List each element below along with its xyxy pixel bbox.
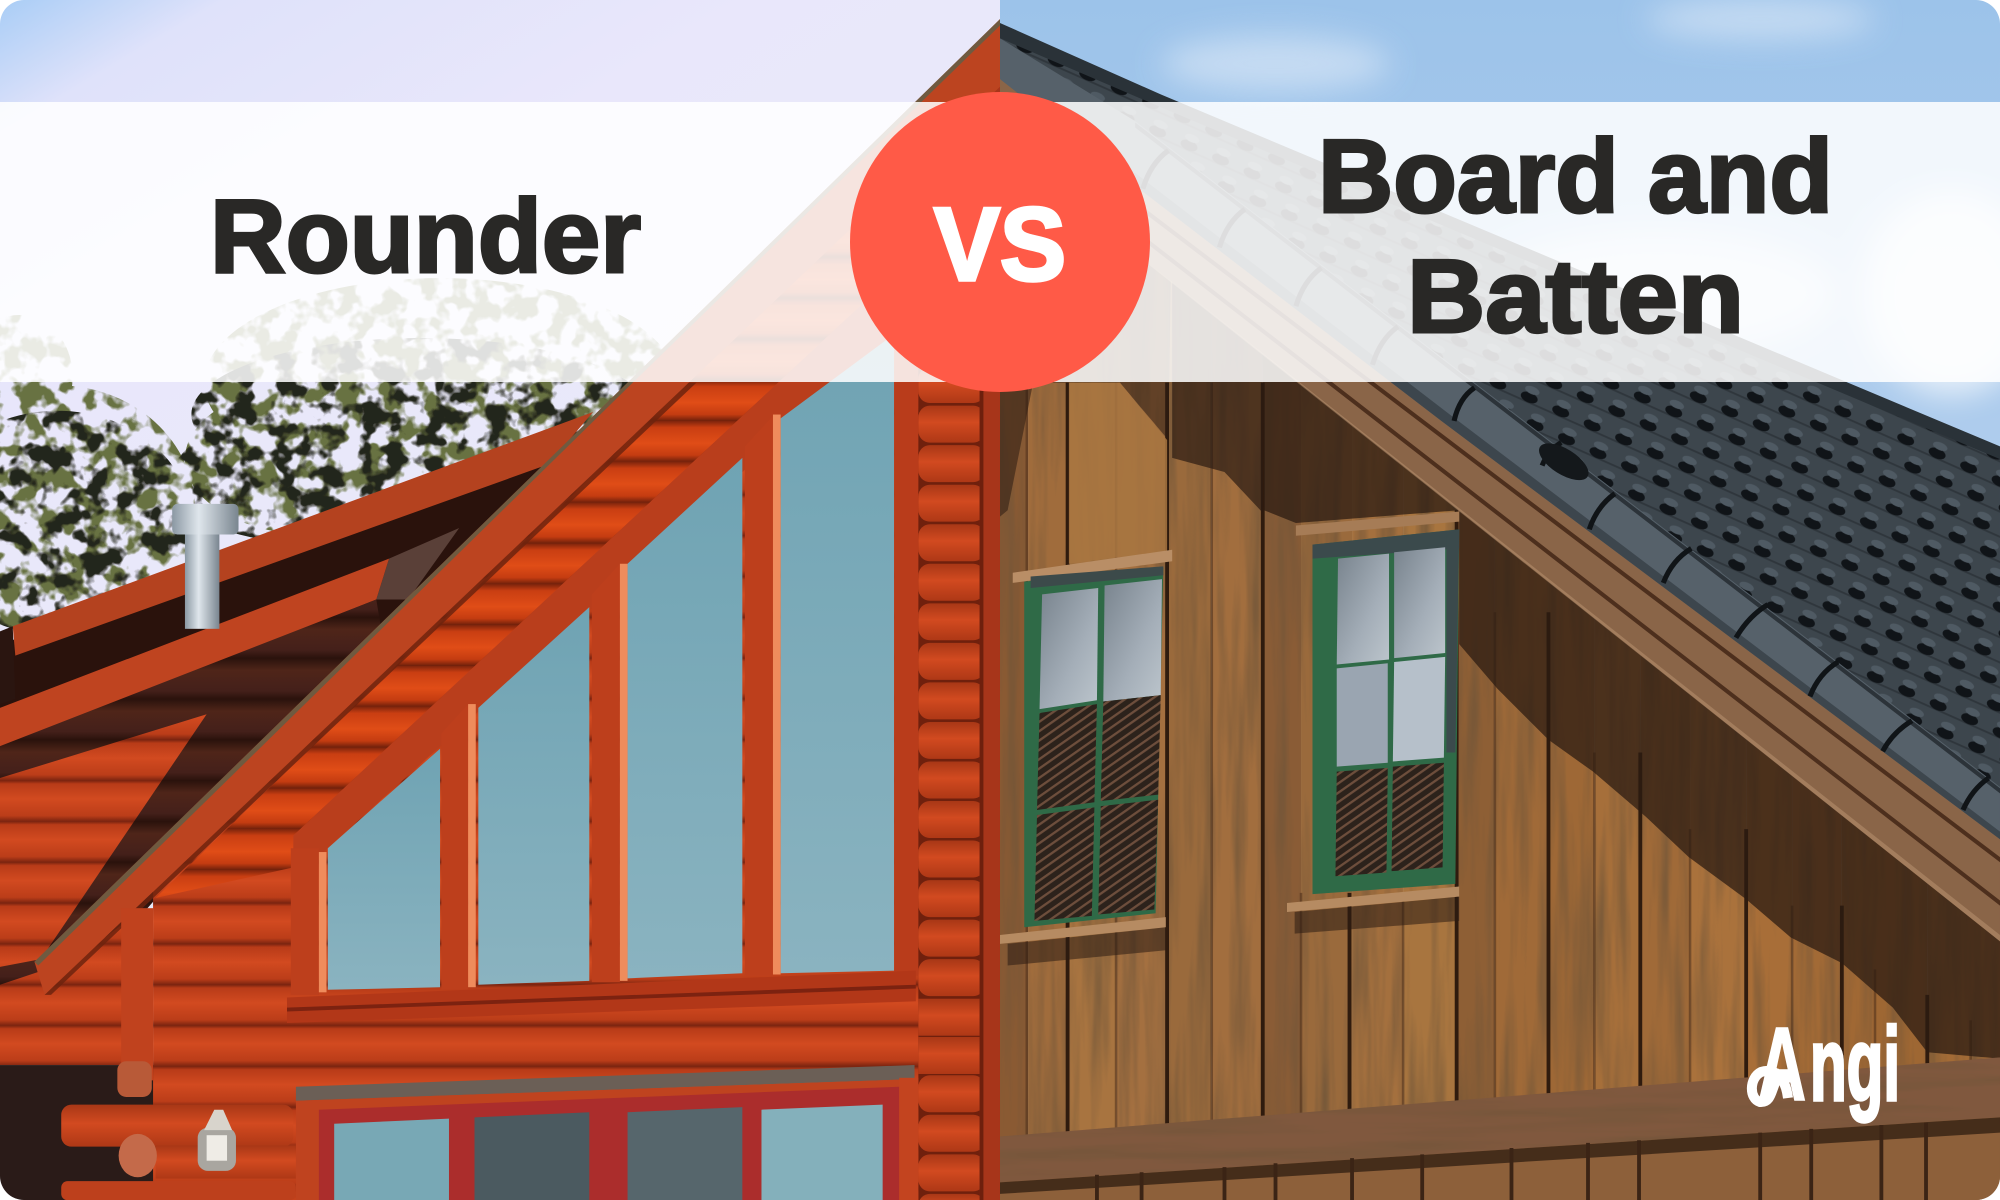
lit gable board	[1069, 383, 1167, 564]
lower fascia board	[0, 559, 389, 749]
title: Board and Batten: Batten	[1407, 239, 1744, 355]
trees behind the cabin	[0, 278, 676, 635]
glass pane 1	[328, 749, 440, 990]
shadow left of gable	[1172, 284, 1263, 511]
versus badge: VS	[934, 187, 1066, 303]
right window	[1287, 511, 1459, 934]
panel: rounder log cabin photo	[0, 0, 1000, 1200]
lower wing logs	[0, 926, 122, 1065]
header band	[0, 102, 2000, 382]
lower window frame	[296, 1079, 915, 1200]
shadow upper gable	[1000, 271, 1170, 516]
main rake beam	[34, 19, 1000, 995]
barge roll tiles	[1000, 38, 2000, 839]
window sill	[287, 971, 916, 1023]
shaded wing wall	[0, 600, 380, 985]
beam shadow line	[45, 383, 696, 995]
window mullions	[291, 325, 918, 995]
main log wall	[153, 382, 918, 1200]
roof tiles	[1000, 28, 2000, 842]
title: Rounder: Rounder	[210, 179, 641, 295]
dark roof underside	[0, 466, 542, 708]
roof edge	[0, 626, 14, 644]
board wall	[1000, 264, 2000, 1200]
glass pane 3	[628, 458, 742, 978]
lower boards	[1000, 1117, 2000, 1200]
rake grain	[1122, 191, 2000, 941]
wall lantern	[198, 1110, 236, 1171]
right log column	[918, 357, 985, 1200]
window head beam	[294, 332, 880, 852]
lower window right trim	[899, 1078, 918, 1200]
title: Board and Batten	[1318, 119, 1833, 355]
horizontal belt board	[1000, 1052, 2000, 1186]
soffit logs	[156, 248, 861, 898]
title: Board and Batten: Board and	[1318, 119, 1833, 235]
Angi logo	[1752, 1007, 1900, 1123]
upper fascia board	[13, 412, 593, 656]
panel: board and batten photo	[1000, 0, 2000, 1200]
left window	[1000, 550, 1172, 966]
lower window gray head trim	[296, 1065, 915, 1101]
corner board	[983, 87, 1000, 1200]
lower window panes	[334, 1105, 883, 1200]
clouds	[1161, 0, 2000, 395]
roof ridge edge	[1000, 23, 2000, 459]
Angi logo: ngi	[1810, 1007, 1900, 1123]
versus badge	[850, 92, 1150, 392]
glass pane 4	[781, 334, 894, 973]
protruding lower logs	[61, 1105, 296, 1200]
chimney vent pipe	[172, 504, 239, 629]
sunlit wing logs	[0, 714, 207, 967]
dark lower wall	[0, 1065, 156, 1200]
Angi logo: A	[1758, 1007, 1806, 1123]
glass pane 2	[478, 607, 589, 985]
rake shadow on the boards	[1262, 356, 2000, 1058]
vertical support post	[117, 908, 153, 1097]
rake fascia	[1000, 77, 2000, 941]
